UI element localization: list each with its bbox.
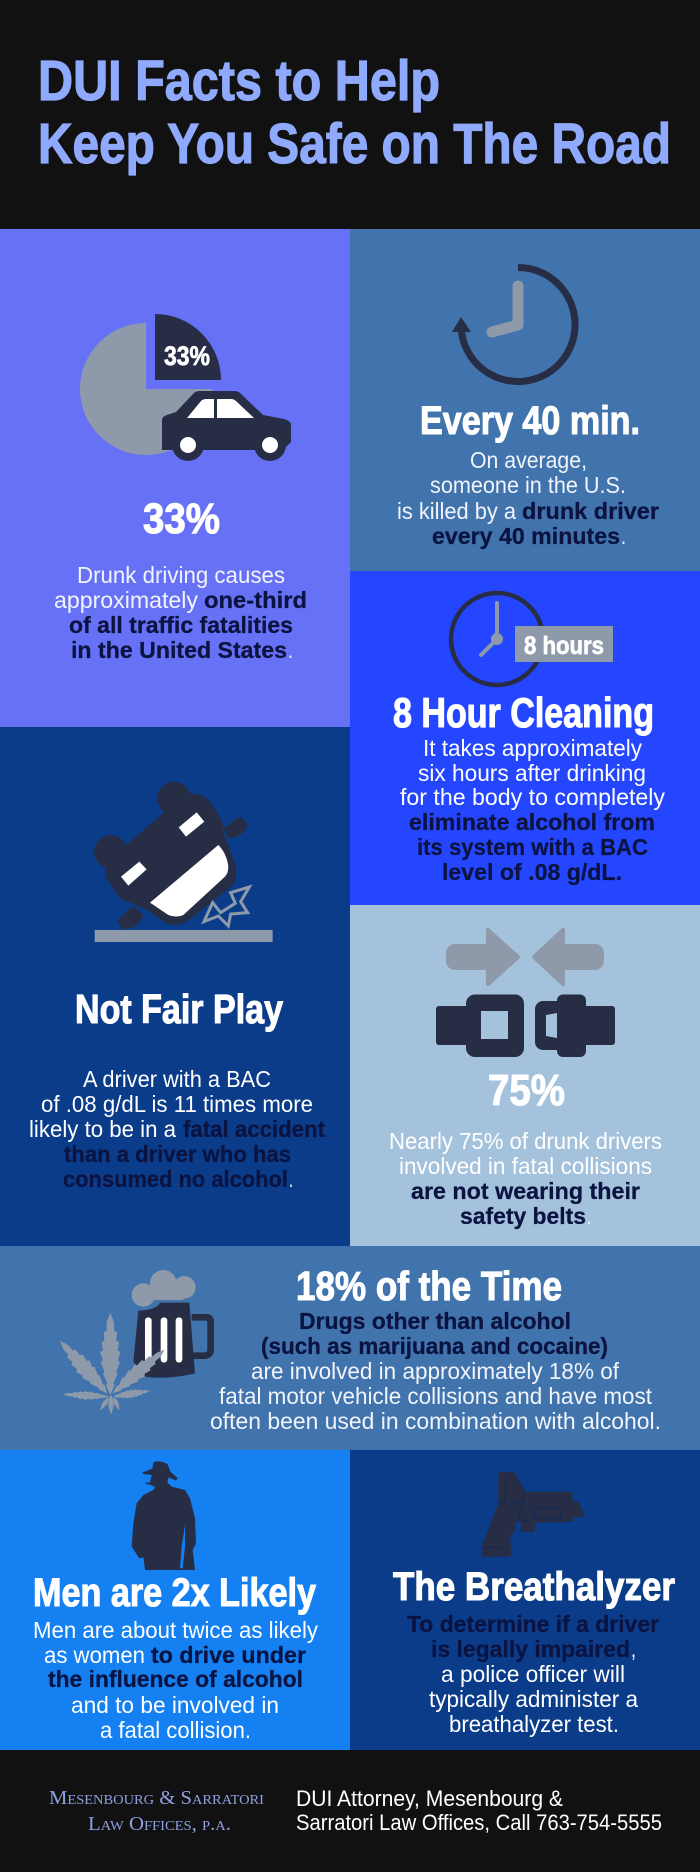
pie chart bbox=[80, 314, 221, 455]
text block: killed every 40 minutes: is killed by a bbox=[397, 498, 516, 524]
text block: not wearing safety belts: . bbox=[587, 1203, 591, 1229]
text block: twice as likely: to drive under bbox=[151, 1642, 306, 1668]
title bbox=[38, 49, 671, 176]
icon: overturned car bbox=[94, 782, 273, 942]
text block: one-third of fatalities: of all traffic fatalities bbox=[69, 612, 293, 638]
panel: every 40 minutes bbox=[350, 229, 700, 571]
text block: not wearing safety belts bbox=[389, 1128, 662, 1229]
heading: 18% of the time: 18% of the Time bbox=[296, 1263, 562, 1309]
text block: drugs in combination with alcohol: are involved in approximately 18% of bbox=[251, 1358, 620, 1384]
text block: drugs in combination with alcohol: Drugs other than alcohol bbox=[299, 1308, 571, 1334]
panel: 33 percent of fatalities bbox=[0, 229, 350, 727]
text block: twice as likely: a fatal collision. bbox=[100, 1717, 251, 1743]
text block: legally impaired test: is legally impaired bbox=[431, 1636, 630, 1662]
text block: legally impaired test bbox=[407, 1611, 659, 1737]
text block: not wearing safety belts: safety belts bbox=[460, 1203, 586, 1229]
text block: one-third of fatalities: Drunk driving causes bbox=[77, 562, 285, 588]
icon: beer mug and cannabis leaf bbox=[53, 1270, 211, 1414]
text block: one-third of fatalities bbox=[54, 562, 307, 663]
heading: 33%: 33% bbox=[143, 495, 220, 543]
heading: every 40 min: Every 40 min. bbox=[420, 399, 640, 443]
heading: men are 2x likely: Men are 2x Likely bbox=[33, 1571, 317, 1615]
icon: clock showing 8 hours: 8 hours bbox=[524, 632, 604, 660]
text block: twice as likely: Men are about twice as likely bbox=[33, 1617, 318, 1643]
text block: not wearing safety belts: Nearly 75% of drunk drivers bbox=[389, 1128, 662, 1154]
text block: drugs in combination with alcohol: often been used in combination with alcohol. bbox=[210, 1408, 661, 1434]
text block: not wearing safety belts: are not wearing their bbox=[411, 1178, 640, 1204]
text block: one-third of fatalities: one-third bbox=[204, 587, 307, 613]
panel: seat belts bbox=[350, 905, 700, 1246]
heading: 75%: 75% bbox=[488, 1066, 565, 1115]
panel: header bbox=[0, 0, 700, 229]
text block: elimination of alcohol: its system with a BAC bbox=[417, 834, 648, 860]
panel: men are 2x likely bbox=[0, 1450, 350, 1750]
text block: elimination of alcohol: level of .08 g/dL. bbox=[442, 859, 622, 885]
text block: killed every 40 minutes: . bbox=[621, 523, 626, 549]
panel: 8 hour cleaning bbox=[350, 571, 700, 905]
text block: 11 times more likely: than a driver who has bbox=[64, 1141, 291, 1167]
text block: legally impaired test: breathalyzer test. bbox=[449, 1711, 619, 1737]
panel: 18 percent of the time bbox=[0, 1246, 700, 1450]
text block: killed every 40 minutes: drunk driver bbox=[522, 498, 659, 524]
text block: killed every 40 minutes bbox=[397, 447, 659, 549]
text block: contact call to action bbox=[296, 1786, 662, 1835]
text block: one-third of fatalities: approximately bbox=[54, 587, 198, 613]
text block: not wearing safety belts: involved in fatal collisions bbox=[399, 1153, 652, 1179]
icon: clock with counter-clockwise arrow bbox=[452, 268, 575, 382]
text block: elimination of alcohol bbox=[400, 735, 665, 885]
text block: elimination of alcohol: six hours after drinking bbox=[418, 760, 646, 786]
icon: converging arrows bbox=[446, 930, 604, 984]
text block: contact call to action: DUI Attorney, Mesenbourg & bbox=[296, 1786, 563, 1811]
title: DUI Facts to Help bbox=[38, 49, 440, 113]
text block: twice as likely: the influence of alcohol bbox=[48, 1666, 303, 1692]
text block: killed every 40 minutes: someone in the U.S. bbox=[430, 472, 626, 498]
text block: 11 times more likely: consumed no alcohol bbox=[63, 1166, 288, 1192]
pie chart: 33% bbox=[164, 341, 210, 371]
icon: breathalyzer device bbox=[482, 1472, 586, 1557]
text block: 11 times more likely: A driver with a BAC bbox=[83, 1066, 271, 1092]
text block: elimination of alcohol: eliminate alcohol from bbox=[409, 809, 655, 835]
text block: 11 times more likely bbox=[29, 1066, 325, 1192]
icon: seat belt buckle bbox=[436, 994, 615, 1057]
text block: 11 times more likely: of .08 g/dL is 11 times more bbox=[41, 1091, 313, 1117]
text block: twice as likely: and to be involved in bbox=[71, 1692, 279, 1718]
logo: law offices: Mesenbourg & Sarratori bbox=[49, 1787, 264, 1809]
text block: elimination of alcohol: It takes approximately bbox=[423, 735, 642, 761]
logo: law offices bbox=[49, 1787, 264, 1835]
text block: 11 times more likely: . bbox=[289, 1166, 293, 1192]
text block: twice as likely bbox=[33, 1617, 318, 1743]
text block: drugs in combination with alcohol bbox=[210, 1308, 661, 1434]
text block: legally impaired test: , bbox=[631, 1636, 636, 1662]
panel: the breathalyzer bbox=[350, 1450, 700, 1750]
text block: one-third of fatalities: in the United States bbox=[71, 637, 287, 663]
text block: drugs in combination with alcohol: fatal motor vehicle collisions and have most bbox=[219, 1383, 653, 1409]
panel: not fair play bbox=[0, 727, 350, 1246]
icon: car bbox=[162, 391, 291, 461]
text block: killed every 40 minutes: every 40 minutes bbox=[432, 523, 620, 549]
text block: legally impaired test: a police officer will bbox=[441, 1661, 625, 1687]
text block: 11 times more likely: likely to be in a bbox=[29, 1116, 176, 1142]
heading: not fair play: Not Fair Play bbox=[75, 986, 283, 1032]
panel: footer bbox=[0, 1750, 700, 1872]
text block: elimination of alcohol: for the body to completely bbox=[400, 784, 665, 810]
logo: law offices: Law Offices, p.a. bbox=[88, 1813, 231, 1835]
text block: legally impaired test: To determine if a driver bbox=[407, 1611, 659, 1637]
text block: legally impaired test: typically administer a bbox=[429, 1686, 638, 1712]
icon: man silhouette bbox=[132, 1461, 196, 1570]
icon: clock showing 8 hours bbox=[451, 593, 613, 685]
text block: killed every 40 minutes: On average, bbox=[470, 447, 587, 473]
text block: 11 times more likely: fatal accident bbox=[183, 1116, 325, 1142]
text block: contact call to action: Sarratori Law Offices, Call 763-754-5555 bbox=[296, 1810, 662, 1835]
text block: one-third of fatalities: . bbox=[288, 637, 293, 663]
text block: twice as likely: as women bbox=[44, 1642, 145, 1668]
text block: drugs in combination with alcohol: (such as marijuana and cocaine) bbox=[261, 1333, 608, 1359]
